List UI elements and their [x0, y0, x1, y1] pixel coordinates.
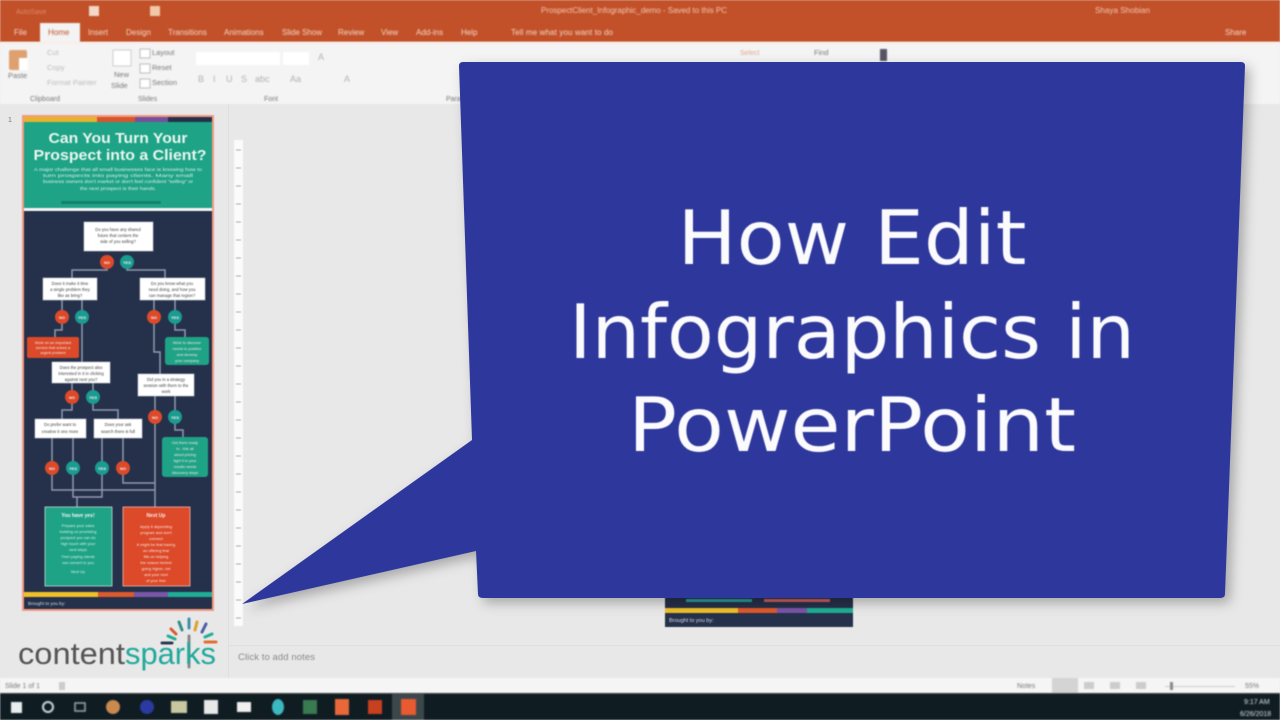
ribbon tabs: Transitions — [168, 28, 207, 37]
small outcome boxes: urgent problem — [40, 351, 66, 355]
result panel: not yet: program and don't — [140, 530, 173, 535]
ribbon tabs: View — [381, 28, 398, 37]
small outcome boxes: your company — [175, 359, 199, 363]
yes and no decision circles: NO — [59, 315, 65, 320]
yes and no decision circles: YES — [69, 466, 77, 471]
status bar: Notes — [1017, 683, 1036, 690]
question text: Does your ask — [105, 422, 132, 427]
flowchart connectors — [52, 262, 185, 507]
result panel: you have yes: You have yes! — [61, 513, 95, 519]
question text: can manage that region? — [149, 293, 196, 298]
small outcome boxes: results needs — [174, 465, 196, 469]
question text: future that centers the — [98, 233, 139, 238]
ribbon tabs: Add-ins — [416, 28, 443, 37]
result panel: you have yes: next steps — [69, 547, 87, 552]
question text: need doing, and how you — [149, 287, 196, 292]
ribbon tabs: Tell me what you want to do — [511, 28, 614, 37]
result panel: you have yes: high touch with your — [61, 541, 96, 546]
ribbon tabs: Insert — [88, 28, 109, 37]
logo: contentsparks: sparks — [125, 636, 216, 671]
yes and no decision circles: YES — [123, 260, 131, 265]
small outcome boxes: service that solves a — [36, 346, 71, 350]
question text: Does the prospect also — [60, 365, 103, 370]
paste icon — [9, 50, 28, 70]
ribbon: A — [344, 74, 350, 84]
yes and no decision circles: NO — [69, 395, 75, 400]
notes placeholder: Click to add notes — [238, 652, 315, 663]
ribbon: Slide — [111, 81, 128, 90]
header band — [24, 122, 212, 211]
ribbon: A — [318, 52, 324, 62]
result panel: you have yes: Prepare your sales — [62, 523, 94, 528]
question text: side of you selling? — [100, 239, 136, 244]
app icons — [106, 699, 416, 715]
callout title: Infographics in — [569, 288, 1135, 376]
result panel: you have yes — [45, 507, 112, 586]
result panel: you have yes: can convert to you — [62, 560, 94, 565]
yes and no decision circles: NO — [120, 466, 126, 471]
small outcome boxes: discovery steps — [172, 471, 198, 475]
result panel: not yet: Apply it depending — [140, 524, 172, 529]
yes and no decision circles: NO — [104, 260, 110, 265]
yes and no decision circles — [45, 255, 182, 475]
small outcome boxes: Work on an important — [35, 341, 72, 345]
ribbon: Font — [264, 96, 278, 103]
task view icon — [75, 703, 85, 711]
speech bubble callout — [242, 62, 1245, 604]
logo: contentsparks: content — [18, 636, 125, 671]
ribbon: Paste — [8, 71, 27, 80]
yes and no decision circles: YES — [89, 395, 97, 400]
brought to you by: Brought to you by: — [28, 601, 65, 606]
yes and no decision circles: YES — [171, 415, 179, 420]
question text: interested in it in clicking — [58, 371, 104, 376]
slide peeking below callout: Brought to you by: — [669, 618, 714, 624]
yes and no decision circles: YES — [98, 466, 106, 471]
small outcome boxes: Work to discover — [173, 341, 202, 345]
question text: Do prefer want to — [44, 422, 77, 427]
small outcome boxes: Get them ready — [172, 441, 198, 445]
question text: Does it make it time — [52, 281, 89, 286]
ribbon tabs: Review — [338, 28, 364, 37]
ribbon: New — [114, 70, 130, 79]
yes and no decision circles: YES — [171, 315, 179, 320]
cortana icon — [43, 702, 53, 712]
ribbon: U — [226, 74, 232, 84]
ribbon: Copy — [47, 63, 65, 72]
ribbon tabs: File — [14, 28, 27, 37]
yes and no decision circles: NO — [152, 415, 158, 420]
callout title: PowerPoint — [628, 381, 1076, 469]
clock: 9:17 AM — [1244, 699, 1270, 706]
taskbar: 6/26/2018 — [1240, 711, 1271, 718]
status bar: Slide 1 of 1 — [5, 683, 40, 690]
question text: work — [162, 389, 171, 394]
small outcome boxes: tight it to your — [174, 459, 197, 463]
yes and no decision circles: NO — [151, 315, 157, 320]
ribbon tabs: Help — [461, 28, 478, 37]
ribbon tabs: Design — [126, 28, 151, 37]
result panel: not yet: fills on helping — [144, 554, 168, 559]
question text: session with them to the — [144, 383, 189, 388]
ribbon tabs: Share — [1225, 28, 1247, 37]
question text: Do you know what you — [151, 281, 194, 286]
question text: Did you in a strategy — [147, 377, 186, 382]
ribbon: Cut — [47, 48, 60, 57]
result panel: not yet: going higher, not — [142, 566, 171, 571]
title bar: Shaya Shobian — [1095, 6, 1150, 15]
header band: A major challenge that all small businesses face is knowing how to — [34, 167, 202, 173]
result panel: you have yes: prospect you can do — [60, 535, 96, 540]
small outcome boxes: to - this all — [176, 447, 194, 451]
result panel: not yet: connect — [149, 536, 164, 541]
small outcome boxes: about pricing — [174, 453, 196, 457]
ribbon: Clipboard — [30, 96, 60, 103]
colour strip — [24, 117, 212, 122]
yes and no decision circles: YES — [78, 315, 86, 320]
taskbar — [0, 693, 1280, 720]
question text: a single problem they — [50, 287, 91, 292]
small outcome boxes: and develop — [177, 353, 197, 357]
result panel: you have yes: Next Up — [71, 569, 85, 574]
result panel: not yet: of your free — [146, 578, 166, 583]
slide peeking below callout — [665, 590, 853, 627]
callout title — [569, 194, 1135, 469]
ribbon: Aa — [290, 74, 301, 84]
logo: contentsparks — [18, 619, 216, 671]
status bar — [0, 678, 1280, 693]
ribbon: Section — [152, 78, 177, 87]
callout title: How Edit — [678, 194, 1026, 282]
header band: Can You Turn Your — [48, 130, 188, 147]
ribbon: Reset — [152, 63, 173, 72]
slide thumbnail infographic — [22, 115, 214, 611]
result panel: not yet — [123, 507, 190, 586]
title bar — [0, 0, 1280, 43]
result panel: not yet: Next Up — [147, 513, 165, 519]
ribbon: Paragraph — [446, 96, 479, 103]
yes and no decision circles: NO — [49, 466, 55, 471]
slide thumbnail number: 1 — [8, 117, 12, 124]
ribbon — [0, 42, 1280, 104]
result panel: not yet: an offering that — [143, 548, 170, 553]
status bar: 55% — [1245, 683, 1259, 690]
ribbon: Find — [814, 48, 829, 57]
result panel: not yet: and your next — [144, 572, 169, 577]
question boxes — [35, 222, 205, 438]
ribbon tabs — [14, 23, 1247, 43]
ribbon: I — [213, 74, 216, 84]
ribbon: Slides — [138, 96, 158, 103]
question text: Do you have any shared — [95, 227, 141, 232]
header band: turn prospects into paying clients. Many small — [43, 173, 193, 179]
question text — [42, 227, 196, 434]
bottom colour bar — [24, 592, 212, 597]
question text: against next you? — [65, 377, 98, 382]
title bar: ProspectClient_Infographic_demo - Saved to this PC — [541, 6, 727, 15]
notes divider — [228, 645, 1280, 646]
question text: search there is full — [101, 429, 135, 434]
small outcome boxes — [27, 337, 209, 477]
vertical ruler — [234, 140, 243, 626]
small outcome boxes: needs to position — [173, 347, 201, 351]
ribbon: B — [198, 74, 204, 84]
header band: Prospect into a Client? — [34, 147, 206, 164]
ribbon: Select — [740, 50, 760, 57]
ribbon tabs: Home — [48, 28, 70, 37]
result panel: you have yes: building on promising — [60, 529, 96, 534]
header band: business owners don't market or don't feel confident "selling" or — [43, 179, 193, 185]
left pane edge — [228, 104, 229, 678]
ribbon: S — [241, 74, 247, 84]
logo rays — [162, 619, 216, 667]
question text: like as bring? — [58, 293, 83, 298]
windows icon — [11, 702, 22, 713]
ribbon: abc — [255, 74, 270, 84]
title bar: AutoSave — [16, 9, 46, 16]
result panel: not yet: the reason behind — [140, 560, 172, 565]
header band: the next prospect is their hands. — [80, 186, 156, 192]
ribbon tabs: Animations — [224, 28, 264, 37]
result panel: you have yes: Then paying clients — [61, 554, 95, 559]
ribbon: Format Painter — [47, 78, 97, 87]
result panel: not yet: It might be that having — [137, 542, 175, 547]
ribbon tabs: Slide Show — [282, 28, 322, 37]
question text: creative it one more — [42, 429, 79, 434]
ribbon: Layout — [152, 48, 175, 57]
